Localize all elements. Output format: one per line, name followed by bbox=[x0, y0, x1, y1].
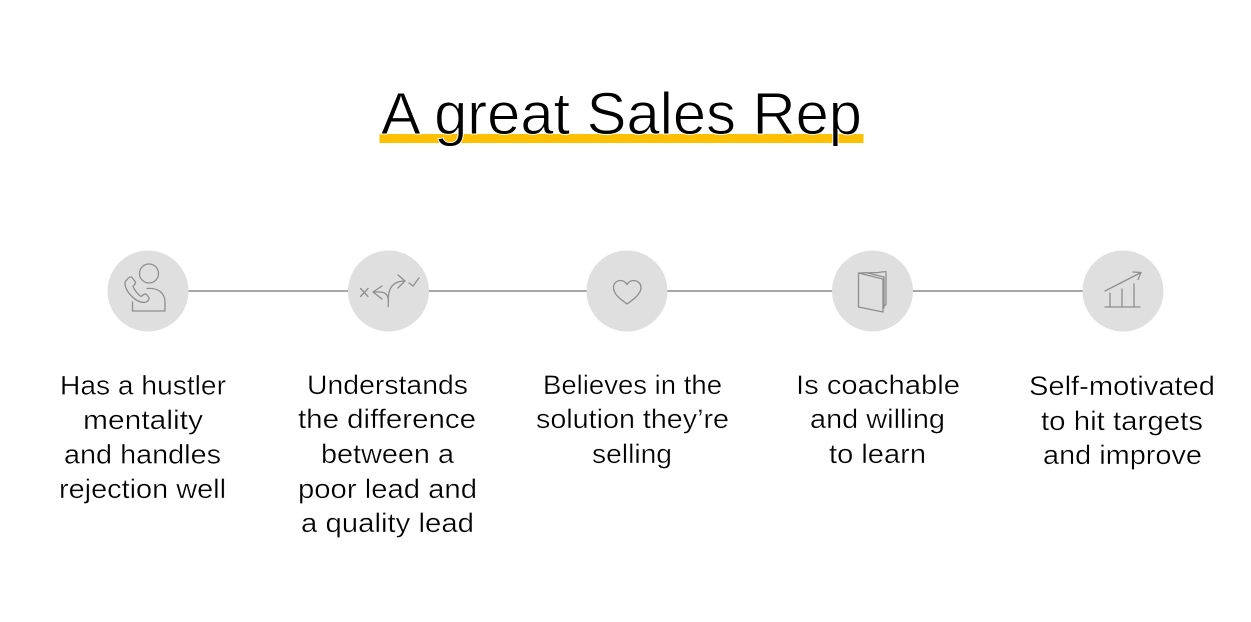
text: step 5: to hit targets bbox=[1041, 406, 1203, 436]
text: step 5: Self-motivated bbox=[1029, 371, 1215, 401]
text: step 4 bbox=[796, 370, 960, 469]
title with yellow underline: A great Sales Rep bbox=[381, 81, 862, 147]
step 1: hustler mentality bbox=[59, 250, 226, 504]
text: step 2: the difference bbox=[298, 404, 476, 434]
text: step 5: and improve bbox=[1043, 440, 1202, 470]
text: step 4: Is coachable bbox=[796, 370, 960, 400]
step 2: poor vs quality lead bbox=[298, 250, 477, 538]
icon: rising bar chart with arrow bbox=[1082, 250, 1164, 332]
text: step 3 bbox=[536, 370, 729, 469]
icon: person on phone bbox=[108, 250, 188, 332]
text: step 2: a quality lead bbox=[301, 508, 474, 538]
text: step 1: Has a hustler bbox=[60, 370, 226, 400]
step 4: coachable bbox=[796, 250, 960, 469]
connector line bbox=[188, 290, 1083, 292]
text: step 3: selling bbox=[592, 439, 672, 469]
text: step 3: Believes in the bbox=[543, 370, 722, 400]
step 5: self-motivated bbox=[1029, 250, 1215, 470]
icon: open booklet bbox=[832, 250, 913, 332]
text: step 2: poor lead and bbox=[298, 474, 477, 504]
text: step 4: and willing bbox=[810, 404, 945, 434]
text: step 2: Understands bbox=[307, 370, 468, 400]
text: step 1: rejection well bbox=[59, 474, 226, 504]
text: step 1: mentality bbox=[83, 405, 204, 435]
text: step 1: and handles bbox=[64, 440, 221, 470]
step 3: believes in solution bbox=[536, 250, 729, 469]
text: step 1 bbox=[59, 370, 226, 504]
icon: heart bbox=[586, 250, 668, 332]
text: step 3: solution they’re bbox=[536, 404, 729, 434]
text: step 2 bbox=[298, 370, 477, 538]
text: step 5 bbox=[1029, 371, 1215, 470]
text: step 4: to learn bbox=[829, 439, 926, 469]
text: step 2: between a bbox=[321, 439, 454, 469]
icon: forked arrows with cross and check bbox=[348, 250, 429, 332]
